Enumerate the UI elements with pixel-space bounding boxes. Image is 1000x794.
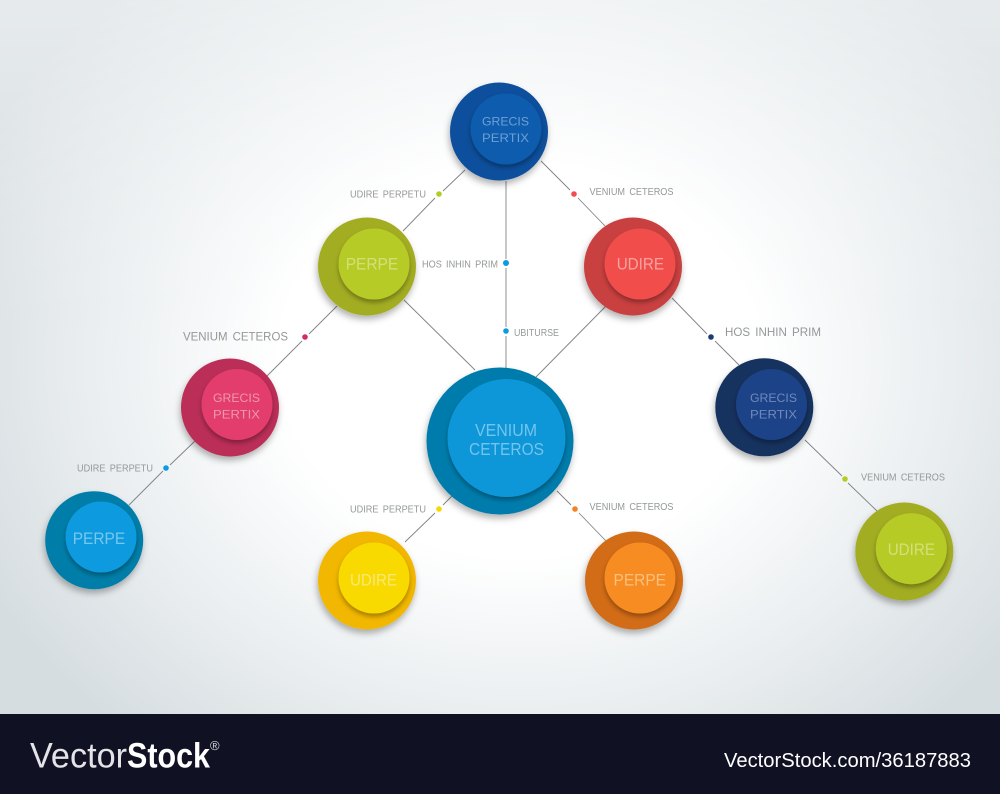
- node: grecis pertix navy: PERTIX: [750, 408, 797, 422]
- connector labels: VENIUM CETEROS: [590, 186, 674, 198]
- node: udire yellow: [318, 532, 416, 630]
- node: perpe green: PERPE: [346, 254, 398, 273]
- node: grecis pertix navy: [715, 358, 813, 456]
- connector labels: VENIUM CETEROS: [183, 330, 288, 344]
- connector labels: UDIRE PERPETU: [350, 188, 426, 200]
- node: grecis pertix crimson: GRECIS: [213, 391, 260, 405]
- connector labels: UBITURSE: [514, 327, 559, 339]
- connector labels: HOS INHIN PRIM: [422, 259, 498, 271]
- node: udire lime: [855, 502, 953, 600]
- connector labels: VENIUM CETEROS: [590, 501, 674, 513]
- node: udire red: [584, 218, 682, 316]
- connector dots: [163, 191, 848, 512]
- node: center venium ceteros: [426, 368, 574, 514]
- connector labels: UDIRE PERPETU: [77, 463, 153, 475]
- node: udire lime: UDIRE: [888, 540, 935, 559]
- node: udire red: UDIRE: [617, 254, 664, 273]
- footer url: VectorStock.com/36187883: [724, 750, 971, 772]
- footer band: [0, 714, 1000, 794]
- node: center venium ceteros: CETEROS: [469, 439, 544, 459]
- connector labels: VENIUM CETEROS: [861, 472, 945, 484]
- node: udire yellow: UDIRE: [350, 570, 397, 590]
- footer logo: [30, 736, 220, 776]
- connector labels: [77, 186, 945, 516]
- node: grecis pertix navy: GRECIS: [750, 391, 797, 405]
- footer logo: ®: [210, 738, 220, 753]
- node: center venium ceteros: VENIUM: [475, 420, 537, 440]
- node: perpe green: [318, 218, 416, 316]
- node: perpe blue: [45, 491, 143, 589]
- node: perpe blue: PERPE: [73, 529, 125, 548]
- footer logo: Vector: [30, 736, 127, 776]
- footer logo: Stock: [127, 736, 210, 776]
- node: grecis pertix crimson: [181, 358, 279, 456]
- node: top grecis pertix: [450, 82, 548, 180]
- node: top grecis pertix: GRECIS: [482, 115, 529, 129]
- node: perpe orange: PERPE: [614, 570, 666, 590]
- node: top grecis pertix: PERTIX: [482, 131, 529, 145]
- node: grecis pertix crimson: PERTIX: [213, 408, 260, 422]
- connector labels: UDIRE PERPETU: [350, 504, 426, 516]
- connector labels: HOS INHIN PRIM: [725, 325, 821, 339]
- connector lines: [129, 161, 877, 542]
- node: perpe orange: [585, 532, 683, 630]
